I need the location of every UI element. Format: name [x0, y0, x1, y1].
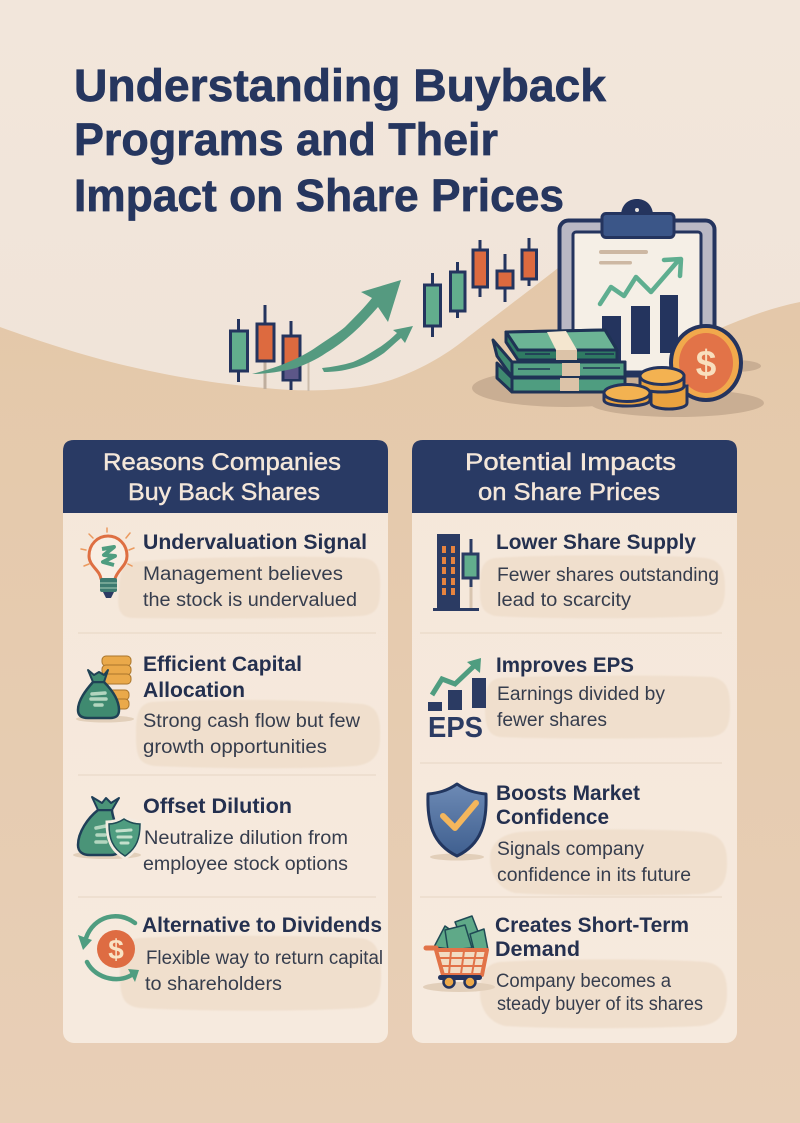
item description: [143, 828, 348, 875]
item title: Lower Share Supply: [496, 531, 696, 554]
icon: circular dollar arrows: [78, 916, 139, 982]
panel heading: on Share Prices: [478, 479, 660, 506]
item description: growth opportunities: [143, 737, 327, 758]
item: creates short-term demand: [423, 914, 703, 1015]
background sand hill: [0, 268, 800, 1123]
icon: money bag with shield: [73, 797, 142, 859]
title: Understanding Buyback: [74, 60, 607, 111]
icon: lightbulb: [81, 528, 134, 598]
panel: reasons companies buy back shares: [63, 440, 388, 1043]
panel heading: Buy Back Shares: [128, 479, 320, 506]
item title: Efficient Capital: [143, 653, 302, 676]
hero illustration: clipboard: [560, 199, 714, 376]
icon: EPS chart: EPS: [428, 712, 483, 744]
item title: Confidence: [496, 806, 609, 829]
item description: Neutralize dilution from: [144, 828, 348, 849]
panel heading: Reasons Companies: [103, 449, 341, 476]
item title: Creates Short-Term: [495, 914, 689, 937]
hero illustration: candlestick chart left: [230, 305, 308, 391]
item description: Earnings divided by: [497, 684, 666, 705]
item title: Alternative to Dividends: [142, 914, 382, 937]
panel header: [412, 440, 737, 513]
title: Programs and Their: [74, 114, 498, 165]
row dividers: [420, 633, 722, 897]
item description: Flexible way to return capital: [146, 948, 383, 969]
item title: Demand: [495, 938, 580, 961]
item title: [496, 782, 640, 829]
icon: EPS chart: [428, 658, 486, 744]
panel heading: Potential Impacts: [465, 449, 676, 476]
item description: to shareholders: [145, 974, 282, 995]
hero illustration: large dollar coin: [671, 326, 741, 400]
item description: Signals company: [497, 839, 644, 860]
panel: potential impacts on share prices: [412, 440, 737, 1043]
hero illustration: gold coins: [604, 368, 687, 409]
item description: [497, 839, 691, 886]
item: efficient capital allocation: [76, 653, 360, 758]
row dividers: [78, 633, 376, 897]
item description: employee stock options: [143, 854, 348, 875]
hero illustration: ground shadows: [472, 360, 764, 417]
item: boosts market confidence: [428, 782, 691, 886]
panel heading: [465, 449, 676, 506]
item description: [143, 564, 357, 611]
item: lower share supply: [433, 531, 719, 611]
item title: Offset Dilution: [143, 795, 292, 818]
item description: lead to scarcity: [497, 590, 632, 611]
highlight blobs: [118, 557, 381, 1011]
item description: steady buyer of its shares: [497, 994, 703, 1015]
highlight blobs: [480, 555, 730, 1028]
item description: Fewer shares outstanding: [497, 565, 719, 586]
panel background: [412, 440, 737, 1043]
item title: [495, 914, 689, 961]
item description: [497, 565, 719, 611]
item: undervaluation signal: [81, 528, 367, 611]
item title: Allocation: [143, 679, 245, 702]
item description: [145, 948, 383, 995]
item description: the stock is undervalued: [143, 590, 357, 611]
icon: shopping cart with cash: [423, 916, 495, 992]
hero illustration: stacked banknotes: [493, 330, 625, 392]
item description: fewer shares: [497, 710, 607, 731]
icon: building with candlestick: [433, 534, 479, 611]
icon: shield with check: [428, 784, 486, 860]
hero illustration: candlestick chart right: [424, 238, 536, 337]
item title: Undervaluation Signal: [143, 531, 367, 554]
panel header: [63, 440, 388, 513]
item description: [143, 711, 360, 758]
panel background: [63, 440, 388, 1043]
title: [74, 60, 607, 221]
item title: Boosts Market: [496, 782, 640, 805]
item description: [496, 971, 703, 1015]
hero illustration: large dollar coin: $: [696, 343, 717, 384]
item description: Strong cash flow but few: [143, 711, 360, 732]
item: alternative to dividends: [78, 914, 383, 995]
item description: Company becomes a: [496, 971, 671, 992]
title: Impact on Share Prices: [74, 170, 564, 221]
item: offset dilution: [73, 795, 348, 875]
item description: confidence in its future: [497, 865, 691, 886]
item: improves eps: [428, 654, 666, 744]
item description: Management believes: [143, 564, 343, 585]
icon: circular dollar arrows: $: [108, 934, 124, 965]
icon: money bag and coins: [76, 656, 134, 722]
hero illustration: rising arrows: [252, 280, 413, 374]
panel heading: [103, 449, 341, 506]
item description: [497, 684, 666, 731]
item title: [143, 653, 302, 702]
item title: Improves EPS: [496, 654, 634, 677]
